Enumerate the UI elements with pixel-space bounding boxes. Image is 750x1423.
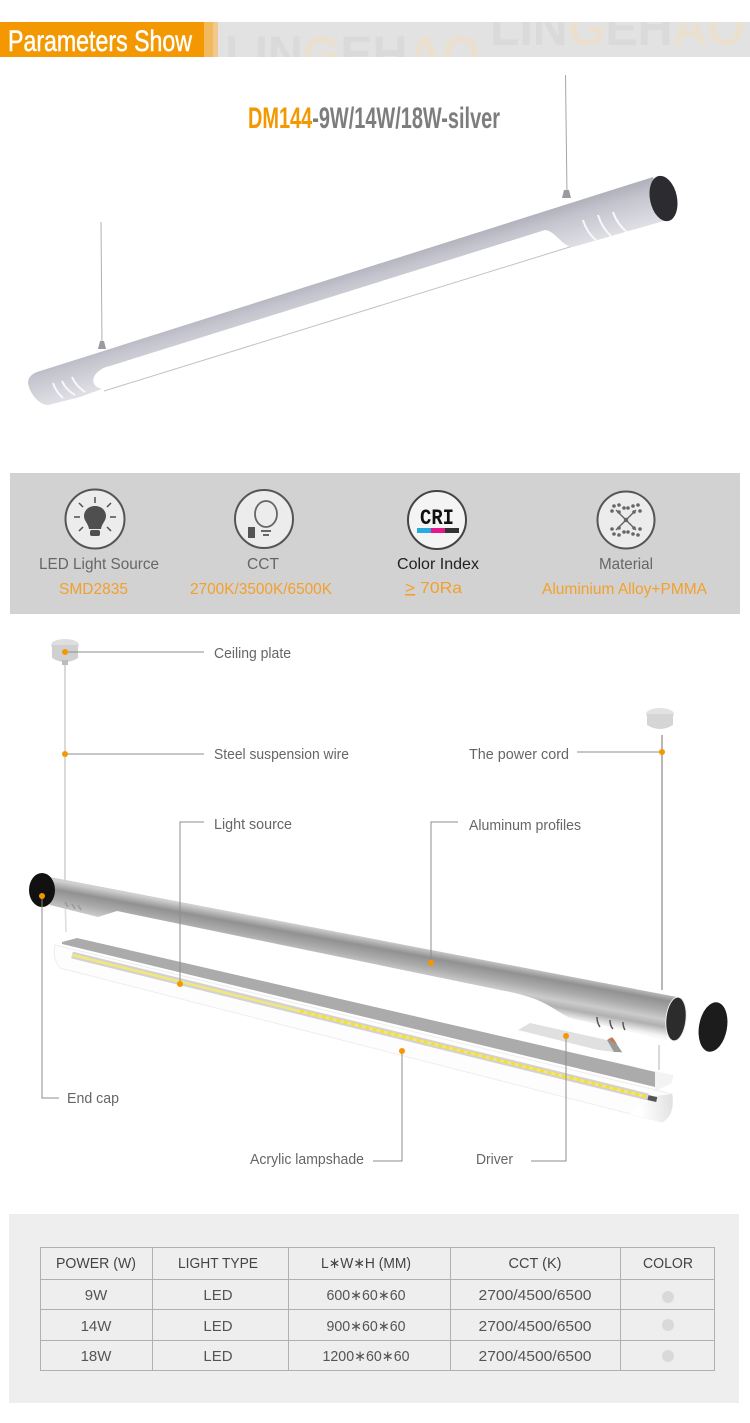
icon: material [598, 492, 654, 548]
panel: specification table [9, 1214, 739, 1403]
tray white lip [655, 1071, 673, 1091]
callout: power cord: The power cord [469, 747, 569, 763]
label: CCT: CCT [247, 556, 279, 573]
table row 18W: 1200∗60∗60 [322, 1348, 410, 1365]
exploded diagram of lamp parts [29, 639, 731, 1122]
tube open end [664, 996, 688, 1042]
value: SMD2835: SMD2835 [59, 581, 128, 598]
callout: aluminum profiles: Aluminum profiles [469, 818, 581, 834]
product title: DM144-9W/14W/18W-silver [248, 102, 500, 135]
callout: aluminum profiles [428, 818, 581, 966]
LED strip [72, 955, 648, 1097]
table row 14W: 2700/4500/6500 [478, 1318, 592, 1335]
table header row: CCT (K) [508, 1255, 562, 1272]
product photo: suspended linear lamp [28, 75, 681, 405]
tube slots [65, 902, 625, 1030]
callout: end cap [39, 893, 119, 1107]
table header row: COLOR [643, 1255, 693, 1272]
ceiling plate left [51, 639, 79, 665]
table row 9W: LED [203, 1287, 233, 1304]
callout: power cord [469, 747, 665, 763]
left end cap [29, 873, 55, 907]
table row 18W: 18W [81, 1348, 112, 1365]
callout: acrylic lampshade: Acrylic lampshade [250, 1152, 364, 1168]
callout: acrylic lampshade [250, 1048, 405, 1168]
table row 9W: 9W [85, 1287, 108, 1304]
callout: ceiling plate [62, 646, 291, 662]
table row 18W [81, 1348, 674, 1365]
icon: CCT lamp [235, 490, 293, 548]
LED chips [72, 955, 646, 1096]
table row 14W: 14W [81, 1318, 112, 1335]
callout: end cap: End cap [67, 1091, 119, 1107]
icon: CRI: CRI [420, 506, 454, 531]
callout: ceiling plate: Ceiling plate [214, 646, 291, 662]
icon: LED bulb [66, 490, 124, 548]
table header row: POWER (W) [56, 1255, 136, 1272]
LED connector [647, 1095, 657, 1102]
aluminium tube [46, 877, 677, 1040]
table row 14W: LED [203, 1318, 233, 1335]
removed right end cap [695, 1000, 731, 1054]
table header row: L∗W∗H (MM) [321, 1255, 411, 1272]
callout: light source: Light source [214, 817, 292, 833]
table header row: LIGHT TYPE [178, 1255, 258, 1272]
table row 18W: 2700/4500/6500 [478, 1348, 592, 1365]
table row 18W: LED [203, 1348, 233, 1365]
header watermark [305, 22, 743, 57]
value: CRI rating: > 70Ra [405, 580, 462, 597]
table header row [56, 1255, 693, 1272]
value: colour temperatures: 2700K/3500K/6500K [190, 581, 332, 598]
suspension wires and cord [65, 660, 662, 1070]
label: LED light source: LED Light Source [39, 556, 159, 573]
panel: key specifications [10, 473, 740, 614]
table row 14W [81, 1318, 674, 1335]
value: materials: Aluminium Alloy+PMMA [542, 581, 707, 598]
callout: steel suspension wire: Steel suspension wire [214, 747, 349, 763]
driver [518, 1023, 623, 1053]
label: material: Material [599, 556, 653, 573]
ceiling plate right [646, 708, 674, 729]
header watermark: LINGEHAO [490, 0, 745, 56]
lampshade end shade [630, 1094, 673, 1122]
callout: driver [476, 1033, 569, 1168]
callout: driver: Driver [476, 1152, 513, 1168]
table row 14W: 900∗60∗60 [326, 1318, 406, 1335]
lampshade outline [54, 945, 673, 1122]
callout: light source [177, 817, 292, 987]
icon: CRI [408, 491, 466, 549]
inner tray [62, 938, 673, 1091]
table row 9W [85, 1287, 674, 1304]
header watermark: LINGEHAO [225, 26, 480, 82]
header band [0, 22, 750, 57]
label: color index: Color Index [397, 556, 479, 573]
table grid [40, 1247, 715, 1371]
table row 9W: 2700/4500/6500 [478, 1287, 592, 1304]
section heading: Parameters Show [8, 25, 192, 58]
LED chip dashes [300, 1011, 646, 1096]
callout: steel suspension wire [62, 747, 349, 763]
table row 9W: 600∗60∗60 [326, 1287, 406, 1304]
